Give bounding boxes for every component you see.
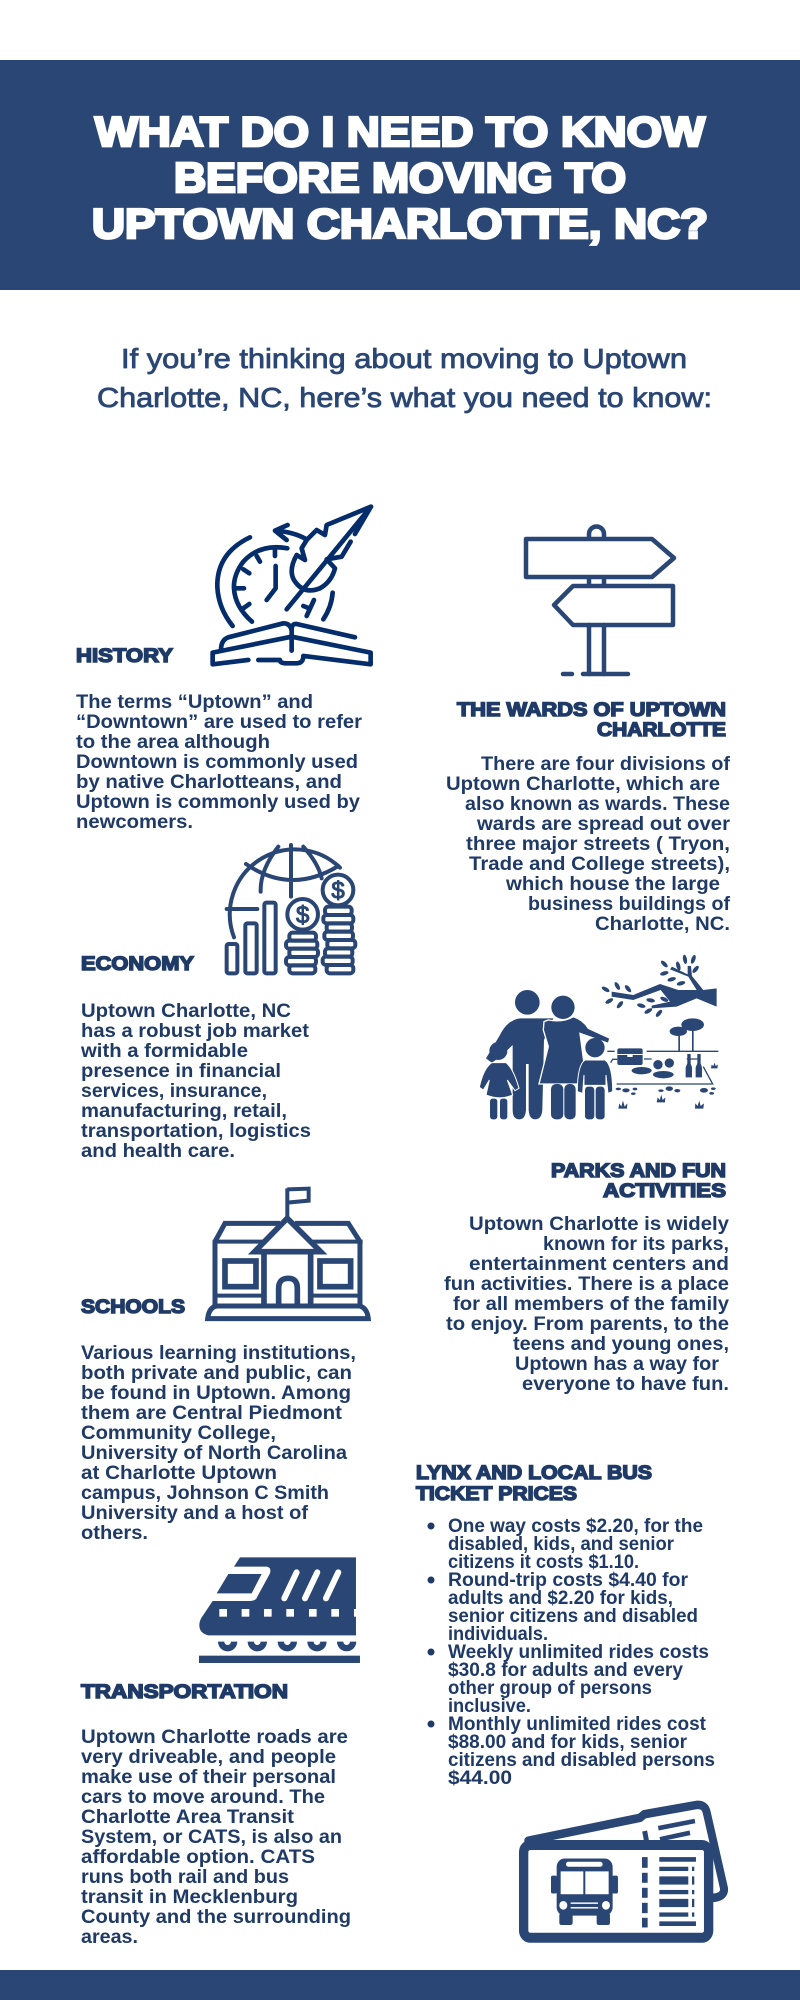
- text block: schools: both private and public, can: [81, 1363, 352, 1384]
- text block: economy: presence in financial: [81, 1061, 281, 1082]
- bullet list: ticket prices: Monthly unlimited rides cost: [448, 1714, 707, 1735]
- title: WHAT DO I NEED TO KNOW: [95, 108, 705, 155]
- text block: parks and fun activities: to enjoy. From parents, to the: [446, 1314, 729, 1335]
- text block: parks and fun activities: known for its parks,: [543, 1234, 729, 1255]
- icon: globe, bars and coins: $: [296, 902, 309, 929]
- text block: the wards: Uptown Charlotte, which are: [446, 774, 720, 795]
- icon: school building: [208, 1188, 368, 1319]
- subtitle: If you’re thinking about moving to Uptown: [121, 343, 687, 374]
- text block: transportation: Uptown Charlotte roads are: [81, 1727, 348, 1748]
- panel: schools: [81, 1188, 368, 1544]
- icon: left child: [479, 1063, 519, 1098]
- text block: transportation: transit in Mecklenburg: [81, 1887, 298, 1908]
- text block: economy: transportation, logistics: [81, 1121, 311, 1142]
- panel: parks and fun activities: [444, 954, 729, 1395]
- text block: parks and fun activities: [444, 1214, 729, 1395]
- icon: bus tickets: [524, 1805, 724, 1938]
- text block: parks and fun activities: Uptown Charlotte is widely: [469, 1214, 729, 1235]
- icon: globe, bars and coins: $: [331, 878, 345, 905]
- text block: economy: has a robust job market: [81, 1021, 310, 1042]
- text block: history: newcomers.: [76, 812, 193, 833]
- footer band: [0, 1970, 800, 2000]
- text block: the wards: Charlotte, NC.: [595, 914, 730, 935]
- icon: picnic blanket: [607, 1051, 718, 1084]
- text block: parks and fun activities: entertainment centers and: [469, 1254, 729, 1275]
- panel: transportation: [81, 1557, 360, 1948]
- text block: the wards: business buildings of: [528, 894, 731, 915]
- text block: the wards: Trade and College streets),: [469, 854, 730, 875]
- text block: history: to the area although: [76, 732, 270, 753]
- text block: transportation: affordable option. CATS: [81, 1847, 315, 1868]
- heading: transportation: TRANSPORTATION: [81, 1681, 288, 1703]
- heading: economy: ECONOMY: [81, 953, 194, 975]
- icon: stones and grass: [616, 1088, 621, 1090]
- bullet list: ticket prices: $30.8 for adults and every: [448, 1660, 683, 1681]
- text block: schools: University of North Carolina: [81, 1443, 347, 1464]
- icon: globe, bars and coins: [227, 845, 355, 973]
- text block: the wards: three major streets ( Tryon,: [466, 834, 730, 855]
- text block: history: by native Charlotteans, and: [76, 772, 342, 793]
- title banner: [0, 60, 800, 290]
- subtitle: [97, 343, 712, 413]
- bullet list: ticket prices: other group of persons: [448, 1678, 652, 1699]
- icon: family picnic: [479, 954, 718, 1119]
- text block: schools: at Charlotte Uptown: [81, 1463, 277, 1484]
- icon: tree branch: [612, 966, 717, 1008]
- bullet list: ticket prices: disabled, kids, and senior: [448, 1534, 675, 1555]
- text block: schools: be found in Uptown. Among: [81, 1383, 351, 1404]
- text block: economy: with a formidable: [80, 1041, 248, 1062]
- icon: clock, quill and book: [213, 507, 371, 664]
- heading: schools: SCHOOLS: [81, 1296, 185, 1318]
- text block: parks and fun activities: for all members of the family: [453, 1294, 729, 1315]
- title: [92, 108, 708, 247]
- heading: parks and fun activities: PARKS AND FUN: [551, 1160, 726, 1182]
- bullet list: ticket prices: $44.00: [448, 1768, 512, 1789]
- bullet list: ticket prices: individuals.: [448, 1624, 548, 1645]
- heading: ticket prices: LYNX AND LOCAL BUS: [416, 1462, 652, 1484]
- bullet list: ticket prices: Weekly unlimited rides costs: [448, 1642, 709, 1663]
- text block: transportation: System, or CATS, is also an: [81, 1827, 342, 1848]
- heading: the wards: THE WARDS OF UPTOWN: [457, 699, 726, 721]
- text block: transportation: very driveable, and people: [81, 1747, 336, 1768]
- text block: history: “Downtown” are used to refer: [76, 712, 363, 733]
- text block: transportation: [81, 1727, 351, 1948]
- bullet list: ticket prices: $88.00 and for kids, senior: [448, 1732, 688, 1753]
- text block: the wards: which house the large: [505, 874, 720, 895]
- text block: schools: [81, 1343, 356, 1544]
- icon: man: [486, 1018, 553, 1119]
- text block: schools: them are Central Piedmont: [81, 1403, 343, 1424]
- heading: parks and fun activities: [551, 1160, 726, 1202]
- bullet list: ticket prices: adults and $2.20 for kids,: [448, 1588, 673, 1609]
- panel: economy: [80, 845, 355, 1162]
- icon: signpost: [526, 527, 674, 674]
- text block: economy: Uptown Charlotte, NC: [81, 1001, 291, 1022]
- panel: the wards: [446, 527, 731, 935]
- text block: economy: manufacturing, retail,: [81, 1101, 287, 1122]
- subtitle: Charlotte, NC, here’s what you need to know:: [97, 382, 712, 413]
- heading: history: HISTORY: [76, 645, 173, 667]
- panel: history: [76, 507, 371, 833]
- text block: economy: services, insurance,: [81, 1081, 267, 1102]
- heading: ticket prices: TICKET PRICES: [416, 1483, 577, 1505]
- text block: parks and fun activities: teens and young ones,: [513, 1334, 729, 1355]
- text block: schools: campus, Johnson C Smith: [81, 1483, 329, 1504]
- bullet list: ticket prices: Round-trip costs $4.40 for: [448, 1570, 689, 1591]
- text block: transportation: runs both rail and bus: [81, 1867, 289, 1888]
- text block: the wards: There are four divisions of: [481, 754, 731, 775]
- icon: distant trees: [678, 1030, 694, 1051]
- heading: ticket prices: [416, 1462, 652, 1505]
- bullet list: ticket prices: inclusive.: [448, 1696, 531, 1717]
- text block: schools: others.: [81, 1523, 148, 1544]
- heading: the wards: [457, 699, 726, 741]
- title: BEFORE MOVING TO: [174, 154, 626, 201]
- panel: lynx and local bus ticket prices: [416, 1462, 724, 1938]
- icon: train: [199, 1557, 360, 1663]
- icon: right child: [577, 1060, 613, 1093]
- text block: schools: University and a host of: [81, 1503, 309, 1524]
- text block: economy: and health care.: [81, 1141, 235, 1162]
- text block: transportation: areas.: [81, 1927, 138, 1948]
- text block: transportation: make use of their personal: [81, 1767, 336, 1788]
- text block: parks and fun activities: fun activities. There is a place: [444, 1274, 729, 1295]
- text block: history: The terms “Uptown” and: [76, 692, 313, 713]
- bullet list: ticket prices: citizens and disabled persons: [448, 1750, 715, 1771]
- text block: parks and fun activities: everyone to have fun.: [522, 1374, 729, 1395]
- title: UPTOWN CHARLOTTE, NC?: [92, 200, 708, 247]
- text block: transportation: cars to move around. The: [81, 1787, 325, 1808]
- heading: parks and fun activities: ACTIVITIES: [603, 1180, 726, 1202]
- text block: transportation: County and the surrounding: [81, 1907, 351, 1928]
- text block: the wards: also known as wards. These: [465, 794, 730, 815]
- text block: history: Downtown is commonly used: [76, 752, 358, 773]
- bullet list: ticket prices: citizens it costs $1.10.: [448, 1552, 639, 1573]
- icon: woman: [539, 1017, 610, 1084]
- heading: the wards: CHARLOTTE: [597, 719, 726, 741]
- text block: history: Uptown is commonly used by: [76, 792, 360, 813]
- bullet list: ticket prices: One way costs $2.20, for the: [448, 1516, 703, 1537]
- text block: schools: Various learning institutions,: [81, 1343, 356, 1364]
- text block: history: [76, 692, 363, 833]
- text block: the wards: [446, 754, 731, 935]
- bullet list: ticket prices: senior citizens and disabled: [448, 1606, 698, 1627]
- bullet list: ticket prices: [428, 1516, 715, 1789]
- text block: schools: Community College,: [81, 1423, 276, 1444]
- text block: the wards: wards are spread out over: [476, 814, 731, 835]
- text block: economy: [80, 1001, 311, 1162]
- text block: transportation: Charlotte Area Transit: [81, 1807, 295, 1828]
- text block: parks and fun activities: Uptown has a way for: [515, 1354, 720, 1375]
